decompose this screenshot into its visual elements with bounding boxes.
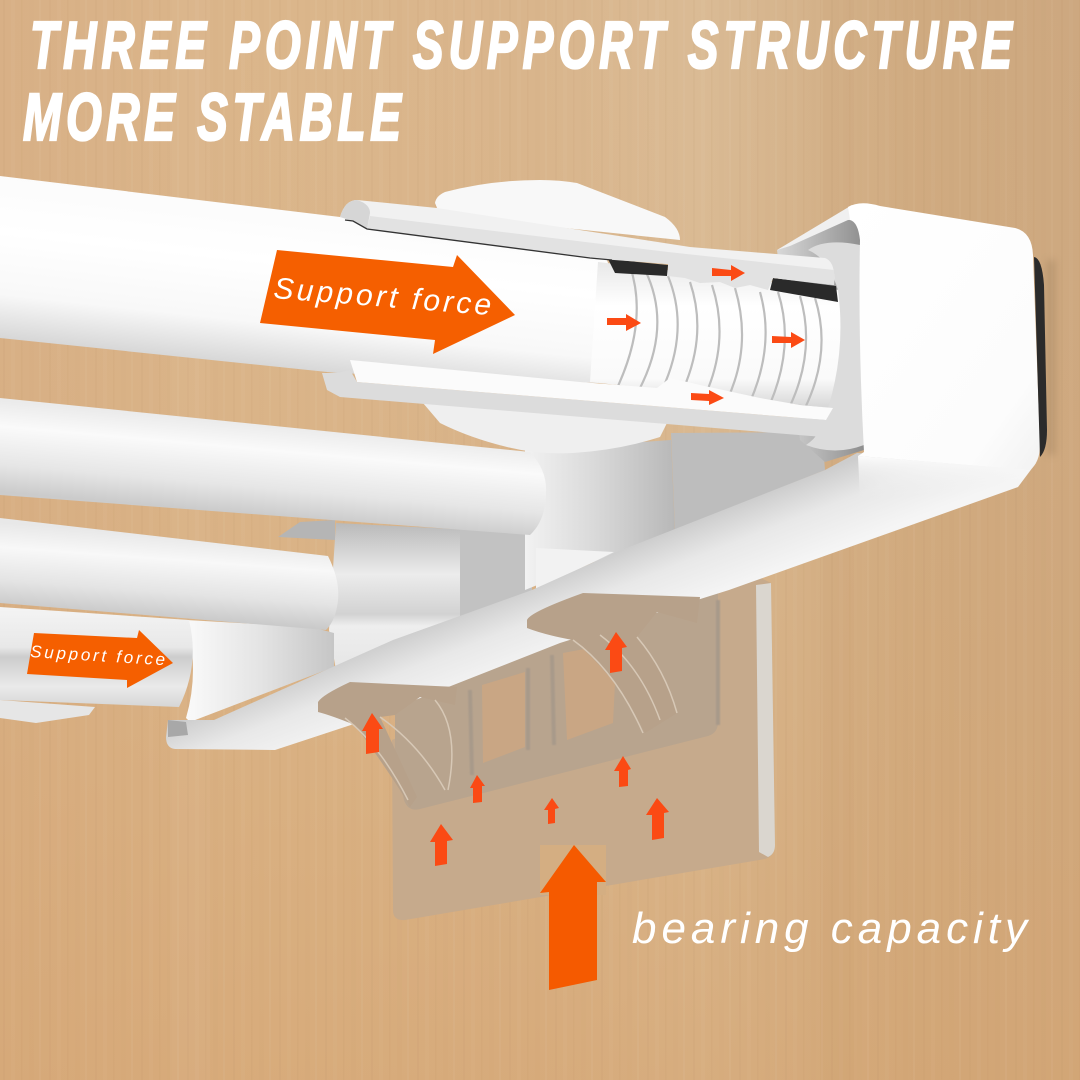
title: MORE STABLE	[23, 80, 402, 155]
rear block	[525, 432, 825, 590]
title	[23, 8, 1013, 155]
window right	[563, 647, 615, 740]
central block	[278, 520, 532, 670]
arrow: spring left	[607, 314, 641, 331]
arrow: rail bottom	[691, 390, 724, 405]
top rail	[340, 200, 834, 290]
arrow up: c	[470, 775, 485, 803]
arrow: rail top	[712, 265, 745, 281]
rail seam	[345, 220, 612, 260]
adhesive plate	[392, 575, 775, 920]
cap lower blend	[858, 456, 1030, 500]
arrow: support force large	[260, 250, 515, 354]
bracket arm	[166, 453, 1036, 750]
rod 2	[0, 398, 546, 535]
lower cylinder	[186, 620, 334, 722]
upper tab	[435, 180, 680, 240]
rod 3	[0, 518, 338, 630]
end cap	[848, 203, 1040, 470]
big arrow	[540, 845, 606, 990]
end cup	[777, 208, 864, 462]
frame ribs	[470, 600, 718, 775]
arrow: support force small	[27, 630, 173, 688]
label: bearing capacity: bearing capacity	[632, 904, 1030, 953]
plate right edge	[756, 583, 775, 857]
rod 4	[0, 607, 193, 723]
arrow up: e	[544, 798, 559, 824]
cup lip	[777, 205, 858, 250]
wood patch behind big arrow	[540, 845, 606, 895]
arm end bracket	[168, 720, 188, 737]
label: support force large: Support force	[272, 272, 492, 322]
arrow up: left hook	[362, 713, 383, 754]
rod 4 tab	[0, 700, 95, 723]
inner ring	[806, 242, 864, 450]
lower tab	[423, 403, 667, 453]
arrow up: g	[430, 824, 453, 866]
window left	[482, 672, 525, 763]
arrow up: f	[646, 798, 669, 840]
hook left	[318, 682, 457, 807]
arrow: spring right	[772, 332, 805, 348]
label: support force small: Support force	[30, 642, 166, 669]
rail white face	[350, 360, 833, 420]
title: THREE POINT SUPPORT STRUCTURE	[30, 8, 1013, 83]
arrow up: right hook	[605, 632, 627, 673]
top rod	[0, 176, 616, 383]
rubber pad	[1034, 257, 1047, 457]
spring	[590, 259, 842, 408]
hook frame	[395, 590, 718, 810]
arrow up: d	[614, 756, 631, 787]
rail end	[340, 200, 370, 229]
hook right	[527, 593, 700, 733]
bottom rail	[322, 360, 833, 437]
rail shadow band	[367, 216, 834, 290]
